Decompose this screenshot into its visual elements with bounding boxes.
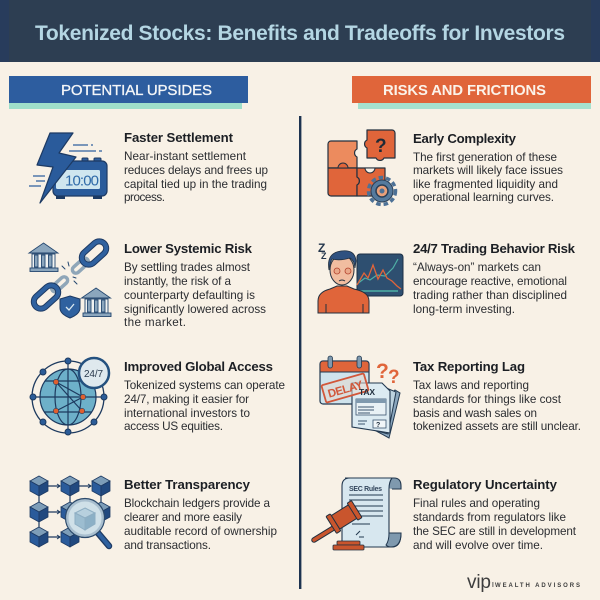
body text bbox=[413, 261, 567, 316]
body text bbox=[124, 379, 285, 433]
body text: standards from regulators like bbox=[413, 511, 566, 524]
body text: the market. bbox=[124, 316, 186, 329]
icon: delayed calendar and tax forms: TAX bbox=[359, 387, 375, 397]
panel: tax reporting lag bbox=[320, 356, 581, 438]
icon: delayed calendar and tax forms: ? bbox=[376, 422, 380, 429]
panel: improved global access bbox=[30, 358, 285, 435]
body text bbox=[124, 150, 268, 204]
body text: like fragmented liquidity and bbox=[413, 178, 558, 191]
icon: SEC rules scroll and gavel: SEC Rules bbox=[349, 486, 382, 493]
body text: Blockchain ledgers provide a bbox=[124, 497, 270, 510]
column header: risks and frictions: RISKS AND FRICTIONS bbox=[383, 83, 546, 99]
heading: 24/7 Trading Behavior Risk bbox=[413, 241, 576, 256]
panel: faster settlement bbox=[29, 130, 268, 204]
heading: Improved Global Access bbox=[124, 359, 273, 374]
body text: counterparty defaulting is bbox=[124, 289, 255, 302]
panel: lower systemic risk bbox=[29, 238, 266, 329]
body text: and will evolve over time. bbox=[413, 539, 543, 552]
body text: significantly lowered across bbox=[124, 303, 266, 316]
body text bbox=[413, 379, 581, 433]
heading: Lower Systemic Risk bbox=[124, 241, 253, 256]
icon: tired trader and chart: Z bbox=[321, 251, 327, 261]
logo: VIP Wealth Advisors: vip bbox=[467, 572, 491, 593]
heading: Early Complexity bbox=[413, 131, 517, 146]
header banner bbox=[0, 0, 600, 62]
body text: By settling trades almost bbox=[124, 261, 251, 274]
body text: operational learning curves. bbox=[413, 191, 554, 204]
body text: and transactions. bbox=[124, 539, 211, 552]
body text: encourage reactive, emotional bbox=[413, 275, 567, 288]
body text: Tax laws and reporting bbox=[413, 379, 529, 392]
body text: The first generation of these bbox=[413, 151, 557, 164]
body text: reduces delays and frees up bbox=[124, 164, 268, 177]
body text: clearer and more easily bbox=[124, 511, 242, 524]
logo: VIP Wealth Advisors bbox=[467, 572, 580, 593]
body text: standards for things like cost bbox=[413, 393, 562, 406]
body text: capital tied up in the trading bbox=[124, 178, 267, 191]
icon: globe with 24/7 clock bbox=[30, 358, 109, 435]
body text bbox=[413, 151, 563, 204]
logo: VIP Wealth Advisors: WEALTH ADVISORS bbox=[495, 583, 580, 589]
icon: delayed calendar and tax forms bbox=[320, 356, 400, 438]
body text: 24/7, making it easier for bbox=[124, 393, 249, 406]
icon: lightning bolt and digital clock bbox=[29, 133, 107, 203]
body text: process. bbox=[124, 191, 165, 204]
body text bbox=[124, 261, 266, 329]
icon: globe with 24/7 clock: 24/7 bbox=[84, 369, 103, 380]
body text bbox=[124, 497, 277, 552]
icon: puzzle pieces and gear: ? bbox=[375, 136, 387, 157]
title: Tokenized Stocks: Benefits and Tradeoffs for Investors bbox=[35, 22, 565, 45]
heading: Regulatory Uncertainty bbox=[413, 477, 558, 492]
icon: SEC rules scroll and gavel bbox=[314, 478, 401, 550]
body text: Tokenized systems can operate bbox=[124, 379, 285, 392]
body text: markets will likely face issues bbox=[413, 164, 563, 177]
body text: “Always-on” markets can bbox=[413, 261, 541, 274]
body text: Near-instant settlement bbox=[124, 150, 247, 163]
column header: potential upsides: POTENTIAL UPSIDES bbox=[61, 82, 212, 99]
panel: 24/7 trading behavior risk bbox=[318, 241, 576, 316]
heading: Faster Settlement bbox=[124, 130, 234, 145]
body text: the SEC are still in development bbox=[413, 525, 577, 538]
icon: blockchain cubes and magnifier bbox=[30, 476, 110, 547]
body text: auditable record of ownership bbox=[124, 525, 277, 538]
body text: access US equities. bbox=[124, 420, 223, 433]
icon: puzzle pieces and gear bbox=[328, 130, 396, 204]
body text: Final rules and operating bbox=[413, 497, 540, 510]
heading: Better Transparency bbox=[124, 477, 251, 492]
icon: lightning bolt and digital clock: 10:00 bbox=[65, 172, 99, 190]
body text: long-term investing. bbox=[413, 303, 515, 316]
body text: tokenized assets are still unclear. bbox=[413, 420, 581, 433]
icon: delayed calendar and tax forms: ? bbox=[376, 360, 389, 383]
body text bbox=[413, 497, 577, 552]
column header: potential upsides bbox=[9, 76, 248, 109]
icon: delayed calendar and tax forms: DELAY bbox=[327, 379, 365, 401]
column header: risks and frictions bbox=[352, 76, 591, 109]
icon: tired trader and chart: Z bbox=[318, 241, 325, 255]
icon: tired trader and chart bbox=[318, 241, 403, 313]
body text: international investors to bbox=[124, 407, 250, 420]
panel: regulatory uncertainty bbox=[314, 477, 577, 552]
heading: Tax Reporting Lag bbox=[413, 359, 525, 374]
icon: broken chain, banks and shield bbox=[29, 238, 111, 318]
icon: delayed calendar and tax forms: ? bbox=[388, 367, 400, 388]
panel: better transparency bbox=[30, 476, 277, 552]
body text: instantly, the risk of a bbox=[124, 275, 231, 288]
body text: basis and wash sales on bbox=[413, 407, 537, 420]
panel: early complexity bbox=[328, 130, 563, 204]
body text: trading rather than disciplined bbox=[413, 289, 567, 302]
